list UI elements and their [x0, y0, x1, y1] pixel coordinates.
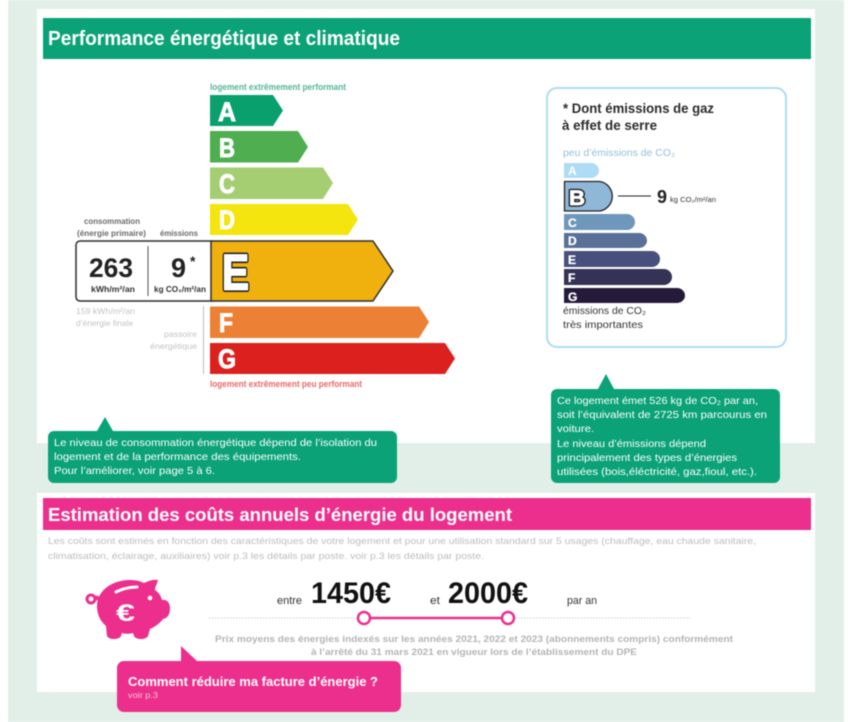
icon: piggy bank: € — [116, 600, 135, 627]
cost range figures: 1450€ — [311, 577, 391, 610]
callout: réduire la facture: Comment réduire ma facture d’énergie ? — [128, 674, 378, 689]
energy class E (current): E — [222, 244, 249, 300]
energy class E (current) — [211, 241, 393, 301]
callout: émissions de CO2: Ce logement émet 526 kg de CO₂ par an, — [557, 395, 758, 407]
value box: consumption and emissions: kg CO₂/m²/an — [154, 284, 206, 294]
callout: émissions de CO2: voiture. — [557, 423, 594, 435]
price note: Prix moyens des énergies indexés sur les années 2021, 2022 et 2023 (abonnements compris) conformément — [215, 634, 734, 645]
intro text: Les coûts sont estimés en fonction des caractéristiques de votre logement et pour une utilisation standard sur 5 usages (chauffage, eau chaude sanitaire, — [48, 536, 756, 547]
passoire énergétique label — [150, 306, 204, 374]
value box: consumption and emissions: 263 — [89, 253, 133, 283]
cost range figures: 2000€ — [448, 577, 528, 610]
callout: réduire la facture: voir p.3 — [128, 690, 158, 700]
CO2 class B (current): B — [569, 187, 585, 210]
final energy note: d’énergie finale — [76, 318, 133, 328]
energy class E (current): E — [222, 244, 249, 300]
callout: émissions de CO2: Le niveau d’émissions dépend — [557, 438, 706, 450]
energy scale top label: logement extrêmement performant — [210, 82, 346, 92]
CO2 class B (current): kg CO₂/m²/an — [670, 197, 716, 204]
panel: émissions de gaz à effet de serre — [547, 88, 786, 347]
callout: émissions de CO2: principalement des types d’énergies — [557, 452, 737, 464]
labels above value box: émissions — [160, 228, 198, 238]
final energy note: 159 kWh/m²/an — [76, 306, 135, 316]
CO2 class G: G — [568, 290, 577, 304]
energy class F: F — [219, 308, 233, 338]
intro text: climatisation, éclairage, auxiliaires) voir p.3 les détails par poste. voir p.3 les détails par poste. — [48, 551, 484, 562]
CO2 class F — [564, 269, 672, 285]
CO2 class B (current) — [564, 182, 716, 211]
energy class C — [210, 168, 333, 199]
labels above value box — [77, 216, 198, 238]
heading: performance: Performance énergétique et climatique — [48, 28, 400, 50]
energy class B — [210, 131, 308, 163]
value box: consumption and emissions: * — [190, 253, 196, 269]
scale bottom label — [563, 306, 646, 331]
callout: réduire la facture — [117, 646, 401, 712]
panel heading — [562, 100, 714, 133]
final energy note — [76, 306, 135, 328]
CO2 class E: E — [568, 253, 576, 267]
scale bottom label: émissions de CO₂ — [563, 306, 646, 317]
energy class F — [210, 306, 429, 338]
value box: consumption and emissions: 9 — [171, 253, 186, 283]
cost range figures: par an — [567, 595, 597, 607]
panel heading: * Dont émissions de gaz — [563, 100, 714, 116]
callout: consommation énergétique: Pour l’améliorer, voir page 5 à 6. — [54, 465, 215, 477]
callout: consommation énergétique: logement et de la performance des équipements. — [54, 451, 301, 463]
CO2 class B (current): B — [569, 187, 585, 210]
passoire énergétique label: énergétique — [150, 341, 197, 351]
heading: performance — [43, 18, 811, 59]
CO2 class C — [564, 214, 635, 230]
CO2 class D — [564, 233, 647, 248]
energy scale bottom label: logement extrêmement peu performant — [210, 379, 362, 389]
panel: performance énergétique et climatique — [37, 9, 815, 443]
energy class D: D — [219, 205, 235, 235]
cost range figures: entre — [277, 595, 302, 607]
energy class G: G — [218, 344, 236, 374]
callout: émissions de CO2: soit l’équivalent de 2725 km parcourus en — [557, 409, 767, 421]
CO2 class F: F — [568, 271, 575, 285]
energy class B: B — [219, 133, 235, 163]
price note — [215, 634, 734, 658]
callout: émissions de CO2: utilisées (bois,éléctricité, gaz,fioul, etc.). — [557, 466, 757, 478]
labels above value box: consommation — [84, 216, 140, 226]
heading: estimation: Estimation des coûts annuels d’énergie du logement — [48, 504, 512, 525]
callout: consommation énergétique: Le niveau de consommation énergétique dépend de l’isolation du — [54, 437, 377, 449]
energy class D — [210, 204, 358, 235]
CO2 class C: C — [568, 216, 577, 230]
panel: estimation des coûts — [37, 493, 815, 692]
CO2 class A — [564, 163, 599, 178]
value box: consumption and emissions: kWh/m²/an — [91, 284, 135, 294]
panel heading: à effet de serre — [562, 117, 657, 133]
icon: piggy bank — [87, 580, 170, 639]
heading: estimation — [43, 498, 811, 530]
CO2 class G — [564, 288, 685, 304]
passoire énergétique label: passoire — [164, 329, 197, 339]
energy class A — [210, 95, 283, 127]
cost range slider — [209, 612, 690, 624]
price note: à l’arrêté du 31 mars 2021 en vigueur lors de l’établissement du DPE — [311, 647, 637, 658]
scale bottom label: très importantes — [563, 320, 643, 331]
labels above value box: (énergie primaire) — [77, 228, 146, 238]
scale top label: peu d’émissions de CO₂ — [563, 148, 675, 159]
callout: consommation énergétique — [48, 417, 397, 483]
CO2 class D: D — [568, 234, 577, 248]
cost range figures — [277, 577, 597, 610]
energy class C: C — [219, 169, 235, 199]
CO2 class A: A — [568, 164, 577, 178]
energy class G — [210, 343, 455, 374]
intro text — [48, 536, 756, 562]
CO2 class E — [564, 251, 660, 267]
callout: émissions de CO2 — [551, 374, 780, 483]
CO2 class B (current): 9 — [657, 187, 667, 207]
value box: consumption and emissions — [76, 241, 216, 301]
energy class A: A — [218, 97, 236, 127]
cost range figures: et — [430, 595, 440, 607]
